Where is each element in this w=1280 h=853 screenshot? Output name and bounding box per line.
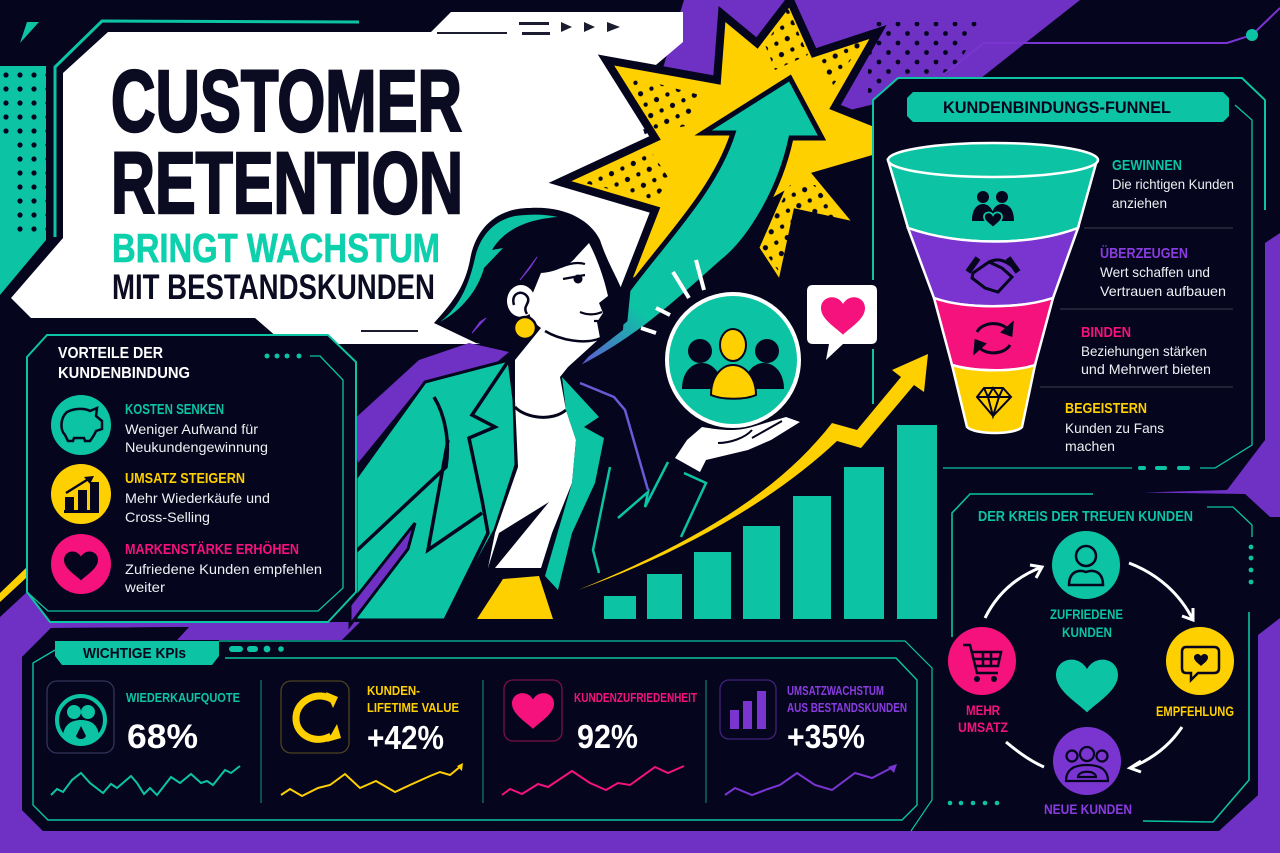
right jacket lapel [545, 377, 604, 590]
jaw line [545, 331, 601, 341]
benefit text: revenue: Cross-Selling [125, 509, 210, 525]
node: more revenue [948, 627, 1016, 735]
customer circle icon [667, 294, 799, 426]
shirt shadow [488, 502, 549, 568]
icon: piggy bank [51, 395, 111, 455]
icon box: repurchase rate [47, 681, 114, 753]
KPI: lifetime value: +42% [367, 719, 444, 756]
KPI: revenue growth [720, 680, 907, 795]
funnel text: begeistern [1065, 400, 1164, 454]
title text: RETENTION [111, 135, 463, 232]
KPI: satisfaction [502, 680, 697, 795]
KPI dividers [261, 680, 706, 803]
shirt and neck [488, 328, 600, 568]
left jacket [356, 360, 516, 620]
funnel text: begeistern: BEGEISTERN [1065, 400, 1147, 417]
benefit text: costs [125, 401, 268, 455]
KPI: lifetime value: KUNDEN- [367, 683, 420, 698]
KPI: lifetime value [281, 681, 463, 796]
eye and brow [561, 263, 602, 321]
node: new customers [1044, 727, 1132, 817]
icon box: satisfaction [504, 680, 562, 741]
panel: benefits [27, 335, 356, 622]
node: satisfied customers: KUNDEN [1062, 624, 1112, 640]
circuit line top right [943, 8, 1280, 75]
heading tab: KPIs [55, 641, 219, 665]
title text: MIT BESTANDSKUNDEN [112, 268, 435, 307]
funnel text: ueberzeugen: Wert schaffen und [1100, 264, 1210, 280]
funnel text: gewinnen [1112, 157, 1234, 211]
icon: brand heart [51, 534, 111, 594]
icon: revenue chart [51, 464, 111, 524]
benefit text: costs: KOSTEN SENKEN [125, 401, 224, 418]
panel dots [264, 354, 302, 358]
hair highlight teal [440, 215, 558, 322]
earring [514, 317, 536, 339]
hair [434, 208, 625, 377]
jacket purple stripe [350, 523, 415, 625]
funnel text: ueberzeugen: Vertrauen aufbauen [1100, 283, 1226, 299]
background shape: purple lower band [0, 568, 1280, 853]
node: more revenue: MEHR [966, 702, 1000, 718]
icon box: lifetime value [281, 681, 349, 753]
funnel text: ueberzeugen [1100, 245, 1226, 299]
tab dots [229, 646, 284, 652]
heading pill: funnel: KUNDENBINDUNGS-FUNNEL [943, 98, 1171, 117]
benefit text: brand: Zufriedene Kunden empfehlen [125, 561, 322, 577]
bar chart [604, 425, 937, 619]
benefit text: costs: Neukundengewinnung [125, 439, 268, 455]
cycle arrows [985, 563, 1193, 772]
KPI: repurchase rate: 68% [127, 718, 198, 756]
funnel text: ueberzeugen: ÜBERZEUGEN [1100, 245, 1188, 262]
funnel text: gewinnen: GEWINNEN [1112, 157, 1182, 174]
purple cape shape [350, 343, 509, 463]
title text: BRINGT WACHSTUM [112, 225, 440, 271]
icon: diamond [977, 388, 1011, 416]
light rays [641, 260, 704, 333]
icon: handshake [968, 258, 1018, 292]
ear [507, 285, 535, 317]
KPI: revenue growth: UMSATZWACHSTUM [787, 683, 884, 698]
jacket outline strokes [580, 383, 706, 573]
KPI: revenue growth: +35% [787, 718, 865, 755]
panel: funnel [873, 78, 1265, 484]
funnel text: gewinnen: Die richtigen Kunden [1112, 176, 1234, 192]
funnel text: begeistern: machen [1065, 438, 1115, 454]
background shape: purple top band [650, 0, 1080, 110]
benefit text: revenue [125, 470, 270, 525]
funnel text: binden [1081, 324, 1211, 377]
title text: CUSTOMER [111, 53, 462, 150]
necklace [515, 407, 566, 417]
heading pill: funnel [907, 92, 1229, 122]
title background panel [11, 12, 683, 344]
benefit text: brand [124, 541, 322, 595]
KPI: revenue growth: AUS BESTANDSKUNDEN [787, 700, 907, 715]
node: new customers: NEUE KUNDEN [1044, 801, 1132, 817]
illustration: woman [350, 208, 800, 625]
node: recommendation: EMPFEHLUNG [1156, 703, 1234, 719]
background shape: purple lower right [1093, 233, 1280, 853]
yellow skirt [477, 576, 553, 619]
speech bubble with heart [807, 285, 877, 360]
node: more revenue: UMSATZ [958, 719, 1008, 735]
benefit text: costs: Weniger Aufwand für [125, 421, 258, 437]
benefit text: brand: weiter [124, 579, 165, 595]
funnel text: binden: BINDEN [1081, 324, 1131, 341]
KPI: satisfaction: KUNDENZUFRIEDENHEIT [574, 690, 697, 705]
heading: loyalty circle: DER KREIS DER TREUEN KUNDEN [978, 508, 1193, 525]
heading: benefits: KUNDENBINDUNG [58, 365, 190, 382]
node: satisfied customers: ZUFRIEDENE [1050, 606, 1123, 622]
KPI: lifetime value: LIFETIME VALUE [367, 700, 459, 715]
divider lines [1040, 228, 1233, 387]
jacket dark lines [350, 360, 509, 620]
starburst [560, 0, 880, 288]
icon box: revenue growth [720, 680, 776, 739]
yellow growth arrow [578, 354, 928, 590]
funnel text: binden: und Mehrwert bieten [1081, 361, 1211, 377]
decorative teal block with dots [0, 22, 46, 295]
hand [675, 417, 800, 472]
heading: benefits: VORTEILE DER [58, 345, 163, 362]
face [528, 243, 608, 342]
funnel text: binden: Beziehungen stärken [1081, 343, 1207, 359]
icon: cycle arrows [975, 324, 1012, 353]
title decoration marks [361, 22, 620, 332]
benefit text: revenue: Mehr Wiederkäufe und [125, 490, 270, 506]
center heart [1056, 660, 1118, 712]
node: recommendation [1156, 627, 1234, 719]
funnel text: gewinnen: anziehen [1112, 195, 1167, 211]
KPI: repurchase rate: WIEDERKAUFQUOTE [126, 690, 240, 705]
title text [111, 53, 463, 307]
KPI: satisfaction: 92% [577, 718, 638, 755]
title teal frame line [55, 21, 359, 237]
benefit text: revenue: UMSATZ STEIGERN [125, 470, 245, 487]
funnel text: begeistern: Kunden zu Fans [1065, 420, 1164, 436]
heading: benefits [58, 345, 190, 382]
rising teal arrow [572, 78, 822, 372]
funnel chart [888, 143, 1098, 433]
icon: people with heart [972, 191, 1014, 228]
panel: KPIs [22, 620, 950, 831]
panel: loyalty circle [940, 490, 1270, 830]
KPI: repurchase rate [47, 681, 240, 795]
benefit text: brand: MARKENSTÄRKE ERHÖHEN [125, 541, 299, 558]
hair highlight purple [472, 257, 537, 333]
node: satisfied customers [1050, 531, 1123, 640]
heading tab: KPIs: WICHTIGE KPIs [83, 645, 186, 662]
